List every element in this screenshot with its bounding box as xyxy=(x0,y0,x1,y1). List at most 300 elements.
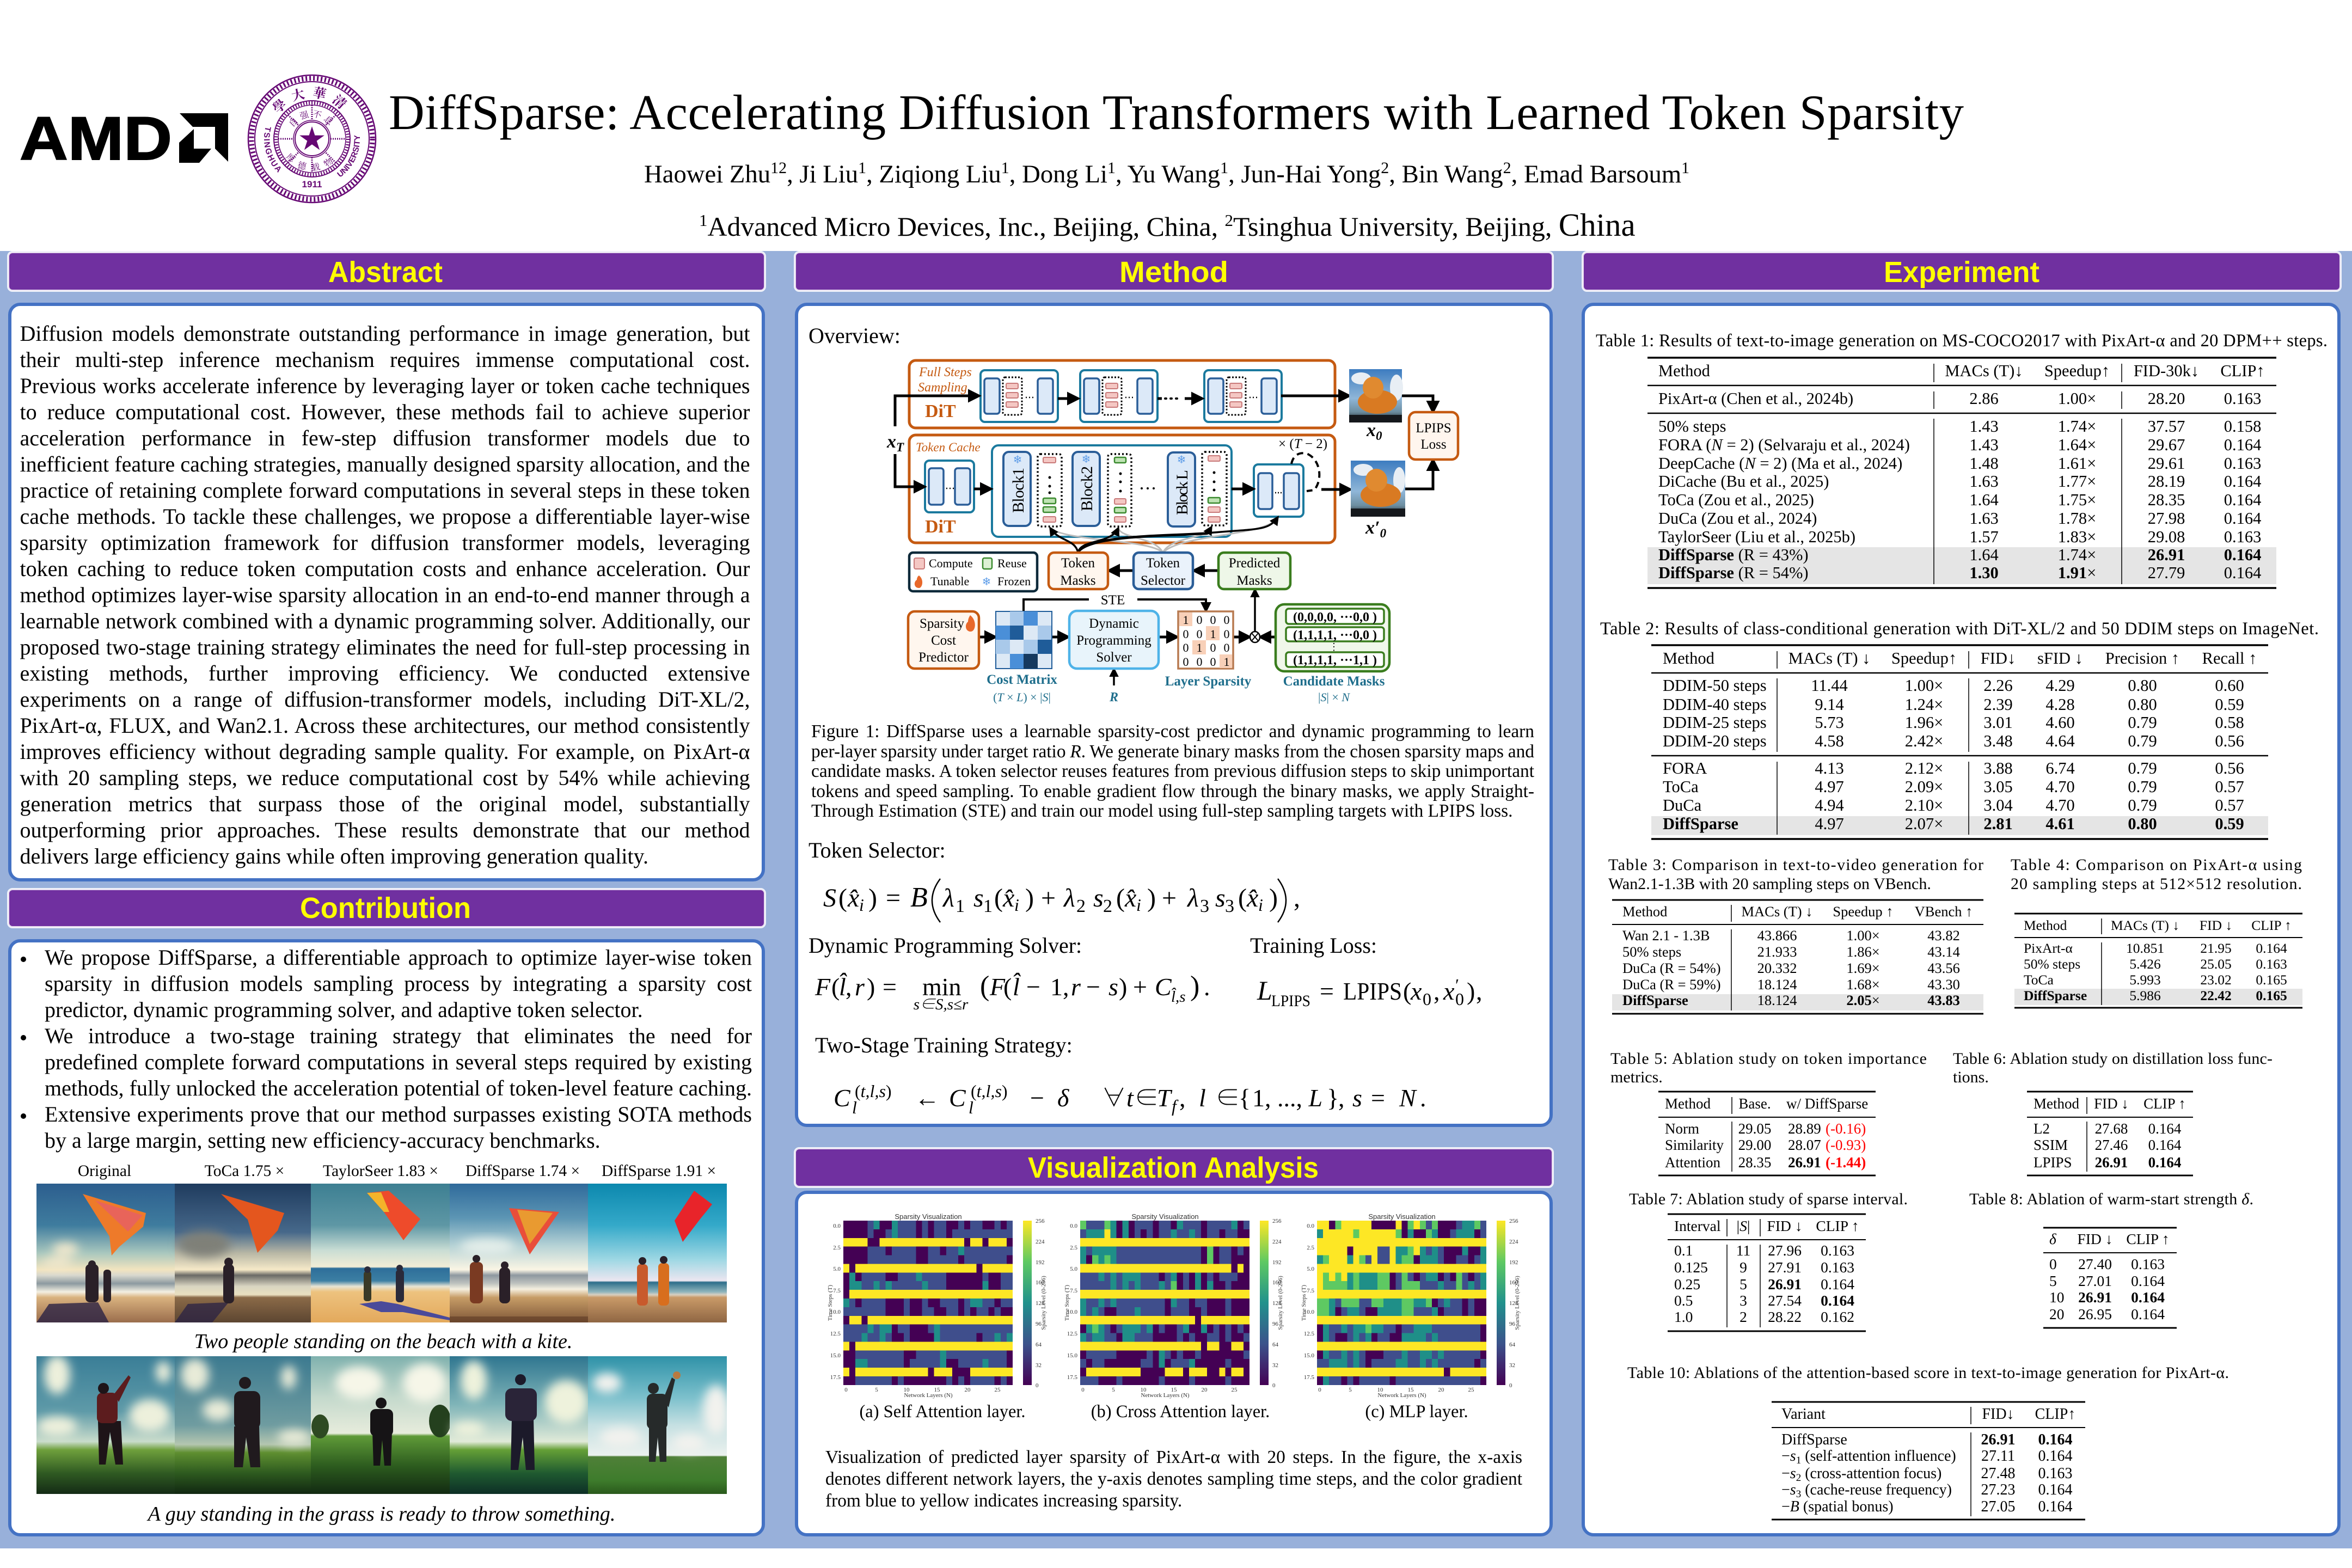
photo: DiffSparse 1.74 beach kite xyxy=(450,1184,588,1322)
equation: token selector xyxy=(823,879,1300,922)
equation: token selector: + xyxy=(1041,884,1056,912)
authors: 2 xyxy=(1503,159,1511,177)
equation: dynamic programming: r xyxy=(1071,973,1081,1001)
table 2: 5.73 xyxy=(1815,713,1844,732)
text: overview: Overview: xyxy=(808,323,901,348)
table 5: 28.07 xyxy=(1788,1137,1821,1153)
table 1: 1.64× xyxy=(2058,436,2096,454)
table 5: (-0.93) xyxy=(1826,1137,1866,1153)
table 5: (-0.16) xyxy=(1826,1120,1866,1137)
abstract text: method optimizes layer-wise sparsity allocation in an end-to-end manner through a xyxy=(20,583,750,607)
cost matrix: Cost Matrix xyxy=(987,672,1057,687)
layer sparsity matrix: 0 xyxy=(1224,641,1229,654)
token selector box: Selector xyxy=(1141,573,1186,588)
table 1: 1.91× xyxy=(2058,564,2096,582)
heatmap c: MLP: 20 xyxy=(1438,1387,1444,1393)
table 6 xyxy=(1953,1050,2273,1175)
table 3: 43.82 xyxy=(1927,927,1960,944)
table 10: 26.91 xyxy=(1981,1431,2016,1448)
table 2: 4.13 xyxy=(1815,759,1844,777)
table 4: MACs (T) ↓ xyxy=(2111,917,2179,933)
table 3: 2.05× xyxy=(1846,992,1880,1008)
equation: two-stage training: f xyxy=(1172,1096,1179,1116)
heatmap a: self attention: 15 xyxy=(934,1387,940,1393)
table 7 xyxy=(1629,1190,1908,1331)
heatmap a: self attention: 160 xyxy=(1036,1279,1045,1286)
table 8: 0.164 xyxy=(2131,1289,2165,1306)
table 7: 0.163 xyxy=(1821,1259,1854,1276)
abstract text: sparsity optimization framework for diffusion transformer models, leveraging xyxy=(20,530,750,555)
table 1: 1.64 xyxy=(1969,491,1999,509)
equation: token selector: , xyxy=(1294,884,1300,912)
visualization paragraph xyxy=(825,1446,1522,1511)
table 5: Base. xyxy=(1738,1095,1771,1112)
authors: , Bin Wang xyxy=(1389,160,1503,188)
table 1 xyxy=(1596,331,2328,588)
table 7: Table 7: Ablation study of sparse interval. xyxy=(1629,1190,1908,1208)
predicted masks box xyxy=(1218,553,1290,589)
table 1: 0.164 xyxy=(2224,564,2261,582)
table 3: VBench ↑ xyxy=(1915,903,1973,920)
table 1: MACs (T)↓ xyxy=(1945,362,2023,380)
table 5: metrics. xyxy=(1610,1068,1663,1086)
table 2: 0.56 xyxy=(2215,759,2244,777)
table 5: Table 5: Ablation study on token importance xyxy=(1610,1050,1927,1068)
equation: dynamic programming: s xyxy=(1108,973,1118,1001)
table 1: CLIP↑ xyxy=(2220,362,2265,380)
equation: two-stage training: . xyxy=(1420,1084,1426,1112)
equation: dynamic programming: . xyxy=(1204,973,1210,1001)
cat output images: x′ xyxy=(1365,518,1380,538)
table 6: tions. xyxy=(1953,1068,1989,1086)
table 10: DiffSparse xyxy=(1781,1431,1847,1448)
table 2: 0.60 xyxy=(2215,676,2244,695)
table 10: CLIP↑ xyxy=(2035,1406,2075,1423)
LPIPS loss box xyxy=(1409,412,1458,460)
equation: dynamic programming: ) xyxy=(1190,971,1199,1002)
photo: original grass xyxy=(36,1355,175,1494)
contribution bullet list: predefined complete forward computations in several steps required by existing xyxy=(45,1050,752,1074)
equation: token selector: i xyxy=(1258,895,1263,915)
table 6: Table 6: Ablation study on distillation loss func- xyxy=(1953,1050,2273,1068)
token cache box: Block L xyxy=(1173,470,1191,515)
table 1: 0.158 xyxy=(2224,417,2261,436)
table 10: FID↓ xyxy=(1982,1406,2014,1423)
table 3: 1.00× xyxy=(1846,927,1880,944)
STE label: STE xyxy=(1101,593,1125,608)
figure 1 caption: candidate masks. A token selector reuses features from previous diffusion steps to skip unimportant xyxy=(811,761,1534,781)
heatmap b: cross attention: 224 xyxy=(1272,1239,1282,1245)
table 1: 1.63 xyxy=(1969,472,1999,491)
table 3: 43.866 xyxy=(1757,927,1797,944)
table 7: 0.164 xyxy=(1821,1276,1854,1293)
equation: dynamic programming: − xyxy=(1086,973,1100,1001)
table 1: 1.43 xyxy=(1969,436,1999,454)
table 4: ToCa xyxy=(2024,972,2054,988)
table 6: LPIPS xyxy=(2033,1154,2072,1171)
table 5: (-1.44) xyxy=(1826,1154,1866,1171)
equation: LPIPS loss: , xyxy=(1476,977,1482,1005)
heatmap c: MLP: 2.5 xyxy=(1307,1245,1314,1251)
equation: dynamic programming: F xyxy=(814,973,831,1001)
table 1: TaylorSeer (Liu et al., 2025b) xyxy=(1658,528,1855,546)
heatmap a: self attention: Sparsity Visualization xyxy=(895,1212,962,1221)
Tsinghua University seal: UNIVERSITY xyxy=(336,135,360,176)
table 2: 0.58 xyxy=(2215,713,2244,732)
heatmap b: cross attention: Sparsity Visualization xyxy=(1131,1212,1199,1221)
table 1: 0.164 xyxy=(2224,491,2261,509)
layer sparsity matrix: 1 xyxy=(1183,613,1189,627)
abstract text: delivers large efficiency gains while often improving generation quality. xyxy=(20,844,648,868)
table 10: 0.163 xyxy=(2038,1465,2072,1482)
table 8: 26.91 xyxy=(2078,1289,2112,1306)
equation: two-stage training: C xyxy=(949,1084,966,1112)
section bar: Abstract: Abstract xyxy=(328,256,443,289)
equation: token selector: 2 xyxy=(1103,896,1112,916)
equation: LPIPS loss: x xyxy=(1443,977,1455,1005)
heatmap b: cross attention: 7.5 xyxy=(1070,1288,1078,1294)
equation: token selector: x̂ xyxy=(847,884,859,912)
equation: token selector: B xyxy=(910,882,928,913)
photo: DiffSparse 1.91 grass xyxy=(588,1356,729,1494)
heatmap c: MLP: Sparsity Level (0-256) xyxy=(1514,1276,1521,1330)
equation: token selector: ) xyxy=(1147,884,1156,912)
heatmap b: cross attention: Sparsity Level (0-256) xyxy=(1277,1276,1284,1330)
heatmap c: MLP: 10 xyxy=(1377,1387,1383,1393)
heatmap a: self attention: 10.0 xyxy=(830,1309,841,1315)
photo: DiffSparse 1.74 grass xyxy=(450,1356,588,1494)
full steps sampling box: Full Steps xyxy=(918,365,972,379)
token cache box: ❄ xyxy=(1082,454,1091,465)
heatmap b: cross attention: 15 xyxy=(1171,1387,1177,1393)
table 2: 3.01 xyxy=(1983,713,2013,732)
table 1: 27.79 xyxy=(2148,564,2185,582)
heatmap c: MLP xyxy=(1301,1212,1521,1399)
layer sparsity matrix: 0 xyxy=(1224,613,1229,627)
table 4: 21.95 xyxy=(2200,940,2232,956)
equation: token selector: 3 xyxy=(1200,896,1209,916)
latent x_T label: T xyxy=(896,440,904,454)
table 2: sFID ↓ xyxy=(2037,649,2083,667)
table 6: 27.68 xyxy=(2095,1120,2128,1137)
table 7: 2 xyxy=(1739,1308,1747,1325)
table 10: −s xyxy=(1781,1448,1796,1465)
cat output images xyxy=(1349,369,1405,540)
visualization paragraph: denotes different network layers, the y-axis denotes sampling time steps, and the color gradient xyxy=(825,1469,1522,1489)
layer sparsity matrix: 0 xyxy=(1224,627,1229,641)
equation: LPIPS loss: 0 xyxy=(1423,989,1431,1009)
table 1: 1.78× xyxy=(2058,509,2096,528)
heatmap captions: (b) Cross Attention layer. xyxy=(1091,1402,1270,1422)
table 7: 3 xyxy=(1739,1292,1747,1309)
cost matrix xyxy=(987,611,1057,704)
equation: token selector: s xyxy=(973,884,984,912)
figure 1 caption: per-layer sparsity under target ratio R. We generate binary masks from the chosen sparsity maps and xyxy=(811,742,1534,762)
dynamic programming solver box: R xyxy=(1109,690,1118,705)
equation: dynamic programming: ( xyxy=(831,973,840,1001)
token masks box: Token xyxy=(1061,556,1095,571)
abstract text: Diffusion models demonstrate outstanding performance in image generation, but xyxy=(20,321,750,346)
abstract text: experiments on a range of diffusion-transformer models, including DiT-XL/2, xyxy=(20,687,750,712)
affiliations: 1 xyxy=(699,211,708,230)
full steps sampling box: DiT xyxy=(925,401,956,421)
heatmap b: cross attention: 10.0 xyxy=(1067,1309,1078,1315)
token cache box: Block2 xyxy=(1078,466,1096,511)
table 10: 27.23 xyxy=(1981,1481,2016,1498)
heatmap c: MLP: 224 xyxy=(1509,1239,1518,1245)
table 2: 0.59 xyxy=(2215,814,2244,833)
equation: token selector: λ xyxy=(1063,884,1075,912)
table 3: 18.124 xyxy=(1757,992,1797,1008)
table 1: 2.86 xyxy=(1969,389,1999,408)
table 2: 0.59 xyxy=(2215,695,2244,714)
table 4: CLIP ↑ xyxy=(2251,917,2292,933)
heatmap a: self attention: 192 xyxy=(1036,1259,1044,1266)
equation: dynamic programming: l̂ xyxy=(839,973,848,1001)
table 1: 29.67 xyxy=(2148,436,2185,454)
table 3: 43.56 xyxy=(1927,960,1960,976)
heatmap b: cross attention: 0 xyxy=(1272,1382,1276,1389)
table 2: DiffSparse xyxy=(1663,814,1738,833)
heatmap a: self attention: 25 xyxy=(994,1387,1001,1393)
table 1: PixArt-α (Chen et al., 2024b) xyxy=(1658,389,1853,408)
panel: contribution xyxy=(8,939,765,1536)
table 2: 2.09× xyxy=(1905,777,1943,796)
table 4: 5.426 xyxy=(2129,956,2161,972)
heatmap a: self attention: 5.0 xyxy=(833,1266,841,1272)
table 8: 0.163 xyxy=(2131,1255,2165,1272)
equation: two-stage training: l xyxy=(1199,1084,1206,1112)
equation: dynamic programming: r xyxy=(855,973,865,1001)
table 10: Variant xyxy=(1781,1406,1826,1423)
equation: LPIPS loss: = xyxy=(1320,977,1334,1005)
table 2: 4.29 xyxy=(2045,676,2075,695)
table 5: 26.91 xyxy=(1788,1154,1821,1171)
equation: token selector: ( xyxy=(1238,884,1247,912)
table 6: L2 xyxy=(2033,1120,2050,1137)
table 2: 2.07× xyxy=(1905,814,1943,833)
table 7: 0.1 xyxy=(1674,1242,1693,1259)
table 4: Table 4: Comparison on PixArt-α using xyxy=(2011,856,2302,874)
equation: dynamic programming: C xyxy=(1155,973,1172,1001)
equation: token selector: ) xyxy=(1269,884,1278,912)
table 1: 1.57 xyxy=(1969,528,1999,546)
equation: two-stage training: , xyxy=(1179,1084,1186,1112)
table 4: 5.993 xyxy=(2129,972,2161,988)
table 1: 0.164 xyxy=(2224,509,2261,528)
equation: token selector: s xyxy=(1215,884,1226,912)
dynamic programming solver box: Dynamic xyxy=(1089,616,1139,631)
figure 1 caption: Through Estimation (STE) and train our model using full-step sampling targets with LPIPS loss. xyxy=(811,801,1513,821)
table 8: 27.40 xyxy=(2078,1255,2112,1272)
equation: two-stage training: N xyxy=(1399,1084,1417,1112)
equation: two-stage training: (t,l,s) xyxy=(971,1081,1008,1101)
heatmap c: MLP: 7.5 xyxy=(1307,1288,1314,1294)
table 4: 22.42 xyxy=(2200,988,2232,1003)
equation: two-stage training: l xyxy=(969,1098,973,1117)
table 2: DuCa xyxy=(1663,796,1702,814)
heatmap b: cross attention: 160 xyxy=(1272,1279,1282,1286)
table 5: Method xyxy=(1665,1095,1711,1112)
predicted masks box: Masks xyxy=(1236,573,1272,588)
equation: two-stage training: ∈ xyxy=(1215,1084,1240,1112)
table 2: 0.56 xyxy=(2215,732,2244,750)
table 2: 1.96× xyxy=(1905,713,1943,732)
equation: dynamic programming: ( xyxy=(1003,973,1012,1001)
equation: token selector: x̂ xyxy=(1246,884,1258,912)
table 5: 29.05 xyxy=(1738,1120,1771,1137)
heatmap b: cross attention: 15.0 xyxy=(1067,1352,1078,1359)
table 2: 0.79 xyxy=(2128,713,2157,732)
candidate masks box: |S| × N xyxy=(1318,690,1350,704)
section bar: Contribution: Contribution xyxy=(300,892,471,924)
table 10: 0.164 xyxy=(2038,1481,2072,1498)
abstract text: PixArt-α, FLUX, and Wan2.1. Across these architectures, our method consistently xyxy=(20,713,750,738)
bullets xyxy=(21,957,26,1119)
panel: method xyxy=(795,303,1553,1127)
table 10: −B (spatial bonus) xyxy=(1781,1498,1894,1515)
contribution bullet list: by a large margin, setting new efficiency-accuracy benchmarks. xyxy=(45,1128,601,1153)
table 2: 4.94 xyxy=(1815,796,1844,814)
table 8: 0.164 xyxy=(2131,1272,2165,1289)
table 10: 27.05 xyxy=(1981,1498,2016,1515)
heatmap a: self attention: Sparsity Level (0-256) xyxy=(1040,1276,1047,1330)
table 3: Wan 2.1 - 1.3B xyxy=(1622,927,1710,944)
abstract text: inefficient feature caching strategies, manually designed sparsity allocation, and the xyxy=(20,452,750,476)
heatmap b: cross attention: Network Layers (N) xyxy=(1141,1392,1190,1399)
contribution bullet list: sparsity in diffusion models sampling process by integrating a sparsity cost xyxy=(45,971,752,996)
heatmap b: cross attention: 25 xyxy=(1232,1387,1238,1393)
equation: dynamic programming: − xyxy=(1026,973,1040,1001)
heatmap c: MLP: 15.0 xyxy=(1304,1352,1314,1359)
authors: 1 xyxy=(1681,159,1689,177)
section bar: Experiment: Experiment xyxy=(1884,256,2039,289)
figure 1 caption xyxy=(811,722,1534,822)
table 2: 0.79 xyxy=(2128,732,2157,750)
table 2: 9.14 xyxy=(1815,695,1844,714)
equation: token selector: λ xyxy=(942,884,954,912)
section bar: Experiment xyxy=(1583,252,2341,291)
table 10: −s xyxy=(1781,1481,1796,1498)
heatmap a: self attention: 64 xyxy=(1036,1342,1042,1348)
table 2: 4.70 xyxy=(2045,796,2075,814)
heatmap b: cross attention: 256 xyxy=(1272,1218,1282,1224)
heatmap b: cross attention: 2.5 xyxy=(1070,1245,1078,1251)
table 10: 27.11 xyxy=(1981,1448,2015,1465)
heatmap b: cross attention: 17.5 xyxy=(1067,1374,1078,1381)
dynamic programming solver box xyxy=(1069,611,1159,705)
table 4: 23.02 xyxy=(2200,972,2232,988)
LPIPS loss box: Loss xyxy=(1420,437,1447,452)
table 1: 1.63 xyxy=(1969,509,1999,528)
heatmap c: MLP: 25 xyxy=(1468,1387,1474,1393)
table 7: 0.164 xyxy=(1821,1292,1854,1309)
sparsity cost predictor box: Predictor xyxy=(918,650,969,665)
heatmap b: cross attention: 96 xyxy=(1272,1321,1278,1327)
table 1: 1.61× xyxy=(2058,454,2096,473)
table 6: 27.46 xyxy=(2095,1137,2128,1153)
table 2: 3.05 xyxy=(1983,777,2013,796)
candidate masks box: (1,1,1,1, ···0,0 ) xyxy=(1293,628,1377,642)
table 7: 11 xyxy=(1736,1242,1750,1259)
table 10: −s xyxy=(1781,1465,1796,1482)
table 7: Interval xyxy=(1674,1217,1721,1234)
table 1: 1.75× xyxy=(2058,491,2096,509)
table 6: SSIM xyxy=(2033,1137,2068,1153)
table 2: 4.61 xyxy=(2045,814,2075,833)
full steps sampling box xyxy=(909,360,1335,428)
heatmap a: self attention: 15.0 xyxy=(830,1352,841,1359)
table 2: DDIM-25 steps xyxy=(1663,713,1767,732)
heatmap a: self attention: 0 xyxy=(1036,1382,1039,1389)
heatmap c: MLP: 256 xyxy=(1509,1218,1518,1224)
layer sparsity matrix: Layer Sparsity xyxy=(1165,674,1252,689)
table 2: 4.28 xyxy=(2045,695,2075,714)
table 6: 0.164 xyxy=(2148,1154,2181,1171)
affiliations: Advanced Micro Devices, Inc., Beijing, China, xyxy=(708,212,1225,242)
predicted masks box: Predicted xyxy=(1229,556,1281,571)
table 3: 21.933 xyxy=(1757,944,1797,960)
equation: dynamic programming: l̂ xyxy=(1013,973,1021,1001)
table 1: 29.08 xyxy=(2148,528,2185,546)
table 2: 4.64 xyxy=(2045,732,2075,750)
heatmap c: MLP: 32 xyxy=(1509,1362,1515,1369)
section bar: Method: Method xyxy=(1119,256,1228,289)
table 7: 0.125 xyxy=(1674,1259,1708,1276)
legend: Compute xyxy=(929,556,973,570)
heatmap a: self attention: 7.5 xyxy=(833,1288,841,1294)
table 10: 2 xyxy=(1796,1472,1801,1484)
table 10: 0.164 xyxy=(2038,1498,2072,1515)
table 1: DiffSparse (R = 43%) xyxy=(1658,546,1809,564)
equation: token selector: i xyxy=(1136,895,1141,915)
equation: token selector: ( xyxy=(994,884,1003,912)
heatmap b: cross attention: 20 xyxy=(1201,1387,1208,1393)
table 2: Method xyxy=(1663,649,1714,667)
table 2: 3.04 xyxy=(1983,796,2013,814)
table 7: 9 xyxy=(1739,1259,1747,1276)
panel: experiment xyxy=(1582,303,2341,1536)
equation: dynamic programming: F xyxy=(989,973,1006,1001)
token masks box xyxy=(1049,553,1108,589)
table 8: δ xyxy=(2049,1230,2057,1247)
caption: two people on the beach: Two people standing on the beach with a kite. xyxy=(194,1330,572,1353)
heatmap b: cross attention: 128 xyxy=(1272,1300,1282,1307)
table 6: 0.164 xyxy=(2148,1137,2182,1153)
token selector box xyxy=(1134,553,1193,589)
heatmap a: self attention: 0.0 xyxy=(833,1223,841,1229)
heatmap a: self attention: 224 xyxy=(1036,1239,1045,1245)
heatmap c: MLP: Time Steps (T) xyxy=(1301,1285,1307,1321)
layer sparsity matrix: 0 xyxy=(1210,641,1216,654)
heatmap a: self attention xyxy=(827,1212,1047,1399)
equation: token selector: = xyxy=(886,884,901,912)
table 3: DuCa (R = 54%) xyxy=(1622,960,1721,976)
table 3: Speedup ↑ xyxy=(1833,903,1894,920)
layer sparsity matrix: 0 xyxy=(1210,613,1216,627)
layer sparsity matrix: 1 xyxy=(1210,627,1216,641)
equation: token selector: ( xyxy=(1116,884,1125,912)
table 3: 1.68× xyxy=(1846,976,1880,993)
authors: , Emad Barsoum xyxy=(1511,160,1681,188)
authors: , Yu Wang xyxy=(1116,160,1220,188)
token cache box: ❄ xyxy=(1013,454,1022,466)
legend: Tunable xyxy=(930,574,969,588)
equation: token selector: i xyxy=(1014,895,1019,915)
heatmap c: MLP: Network Layers (N) xyxy=(1377,1392,1426,1399)
table 3: Method xyxy=(1622,903,1667,920)
equation: token selector: i xyxy=(859,895,864,915)
